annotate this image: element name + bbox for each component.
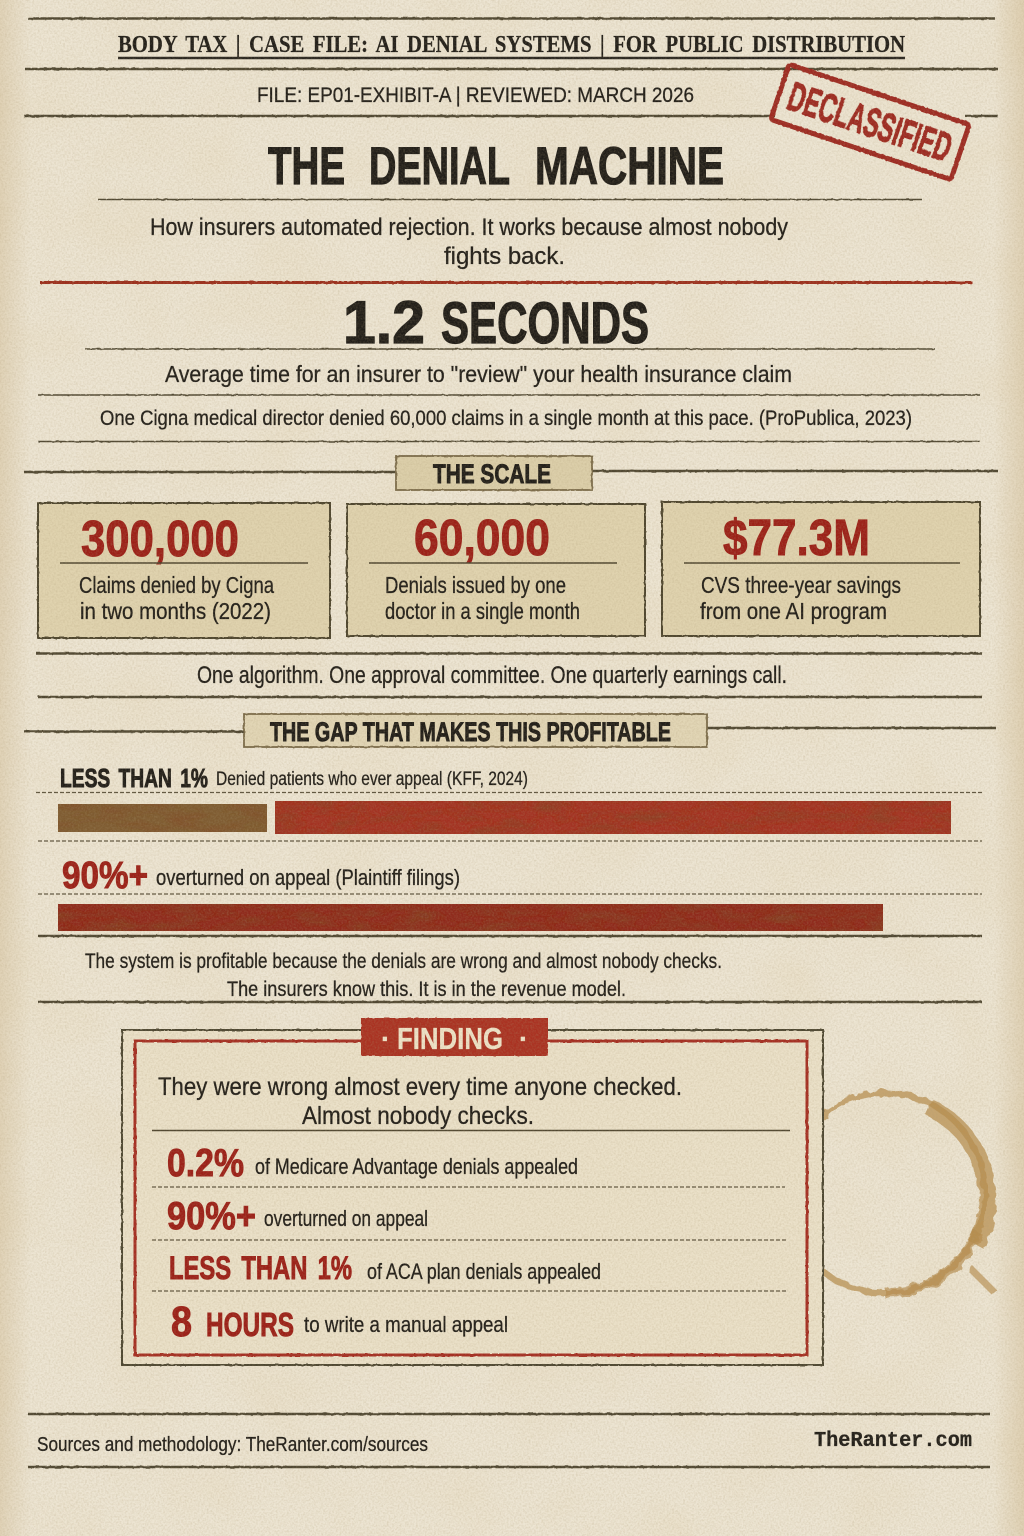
title: THE — [268, 137, 345, 196]
stat row: 0.2%: of Medicare Advantage denials appealed — [255, 1154, 578, 1179]
panel: finding: They were wrong almost every time anyone checked. — [158, 1073, 682, 1101]
bar chart: overturned: overturned on appeal (Plaintiff filings) — [156, 865, 460, 890]
badge: finding: · — [519, 1023, 528, 1054]
card: $77.3M: from one AI program — [700, 598, 887, 624]
badge: finding: FINDING — [397, 1021, 503, 1056]
stamp: declassified — [771, 64, 969, 180]
badge: finding: · — [381, 1023, 390, 1054]
title — [268, 137, 724, 196]
stat row: less than 1%: LESS THAN 1% — [169, 1250, 352, 1286]
stat row: less than 1% — [169, 1250, 601, 1286]
icon: coffee ring stain — [785, 1093, 995, 1293]
card: $77.3M: $77.3M — [723, 509, 870, 566]
stat row: 8 hours: HOURS — [206, 1306, 294, 1343]
gap conclusion: The insurers know this. It is in the revenue model. — [227, 977, 626, 1001]
card: $77.3M — [662, 502, 980, 636]
bar chart: overturned: 90%+ — [62, 855, 148, 897]
bar chart: appeal rate: Denied patients who ever appeal (KFF, 2024) — [216, 768, 528, 790]
section heading: the gap: THE GAP THAT MAKES THIS PROFITABLE — [270, 717, 671, 747]
stat row: 0.2%: 0.2% — [167, 1142, 244, 1185]
file reference: FILE: EP01-EXHIBIT-A | REVIEWED: MARCH 2026 — [257, 84, 694, 107]
panel: finding — [122, 1018, 823, 1365]
hero stat: 1.2 seconds: 1.2 — [343, 289, 425, 356]
section heading: the scale: THE SCALE — [433, 459, 551, 489]
stat row: 8 hours: to write a manual appeal — [304, 1312, 508, 1337]
card: 60,000: doctor in a single month — [385, 598, 580, 624]
footer: sources: Sources and methodology: TheRanter.com/sources — [37, 1433, 428, 1456]
card: 300,000: Claims denied by Cigna — [79, 572, 274, 598]
title: DENIAL — [369, 137, 510, 196]
hero note: One Cigna medical director denied 60,000 claims in a single month at this pace. (ProPublica, 2023) — [100, 407, 912, 430]
hero caption: Average time for an insurer to "review" your health insurance claim — [165, 361, 792, 387]
card: $77.3M: CVS three-year savings — [701, 572, 901, 598]
card: 60,000 — [347, 504, 645, 636]
hero stat: 1.2 seconds: SECONDS — [441, 291, 649, 356]
bar chart: overturned — [38, 855, 982, 931]
panel: finding: Almost nobody checks. — [302, 1102, 534, 1130]
subtitle — [150, 214, 788, 270]
card: 60,000: 60,000 — [414, 509, 550, 566]
stat row: 90%+ — [167, 1195, 428, 1238]
badge: finding — [361, 1018, 548, 1056]
card: 300,000: in two months (2022) — [80, 598, 271, 624]
subtitle: fights back. — [444, 243, 565, 270]
card: 300,000: 300,000 — [81, 510, 239, 567]
stat row: 8 hours — [171, 1298, 508, 1346]
bar chart: appeal rate: LESS THAN 1% — [60, 763, 208, 793]
gap conclusion — [85, 949, 722, 1001]
stat row: 90%+: 90%+ — [167, 1195, 256, 1238]
footer: brand: TheRanter.com — [814, 1430, 972, 1453]
subtitle: How insurers automated rejection. It works because almost nobody — [150, 214, 788, 241]
stat row: 0.2% — [167, 1142, 578, 1185]
card: 60,000: Denials issued by one — [385, 572, 566, 598]
stat row: 8 hours: 8 — [171, 1298, 192, 1346]
scale summary line: One algorithm. One approval committee. One quarterly earnings call. — [197, 662, 787, 689]
stat row: 90%+: overturned on appeal — [264, 1206, 428, 1231]
hero stat: 1.2 seconds — [343, 289, 649, 356]
header strip: BODY TAX | CASE FILE: AI DENIAL SYSTEMS | FOR PUBLIC DISTRIBUTION — [118, 32, 906, 58]
bar chart: appeal rate — [36, 763, 982, 841]
gap conclusion: The system is profitable because the denials are wrong and almost nobody checks. — [85, 949, 722, 973]
section heading: the scale — [396, 456, 592, 490]
title: MACHINE — [535, 137, 724, 196]
card: 300,000 — [38, 503, 330, 638]
stat row: less than 1%: of ACA plan denials appealed — [367, 1259, 601, 1284]
